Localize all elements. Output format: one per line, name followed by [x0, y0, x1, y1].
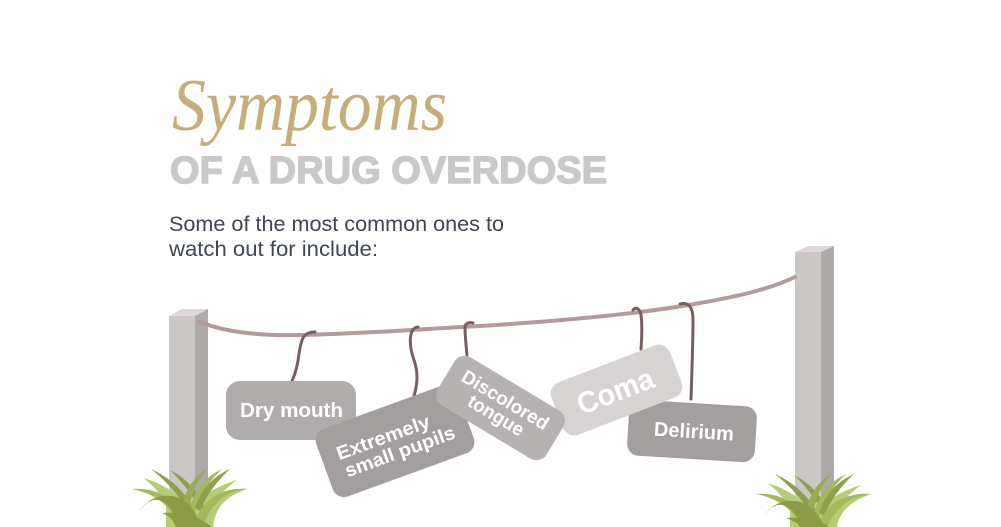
tag: dry mouth: [226, 381, 356, 440]
left post: [169, 309, 208, 527]
tag: extremely small pupils: Extremely: [334, 412, 433, 465]
rope: [200, 277, 795, 335]
tag: delirium: [626, 399, 758, 463]
tag: extremely small pupils: small pupils: [342, 423, 458, 482]
icon: right grass: [756, 473, 872, 527]
intro text: watch out for include:: [168, 238, 378, 261]
intro text: Some of the most common ones to: [169, 213, 504, 236]
tag: extremely small pupils: [312, 382, 478, 500]
tag: dry mouth: Dry mouth: [240, 400, 343, 422]
hanging strings: [292, 304, 693, 399]
right post: [795, 246, 834, 527]
tag: coma: [547, 341, 686, 439]
intro text: [168, 213, 504, 261]
tag: discolored tongue: tongue: [464, 391, 528, 441]
title: Symptoms: Symptoms: [172, 65, 447, 147]
tag: discolored tongue: Discolored: [457, 366, 552, 435]
icon: left grass: [132, 468, 248, 527]
heading: of a drug overdose: OF A DRUG OVERDOSE: [170, 150, 607, 192]
tag: delirium: Delirium: [653, 419, 735, 446]
tag: coma: Coma: [572, 362, 659, 422]
tag: discolored tongue: [432, 351, 569, 465]
